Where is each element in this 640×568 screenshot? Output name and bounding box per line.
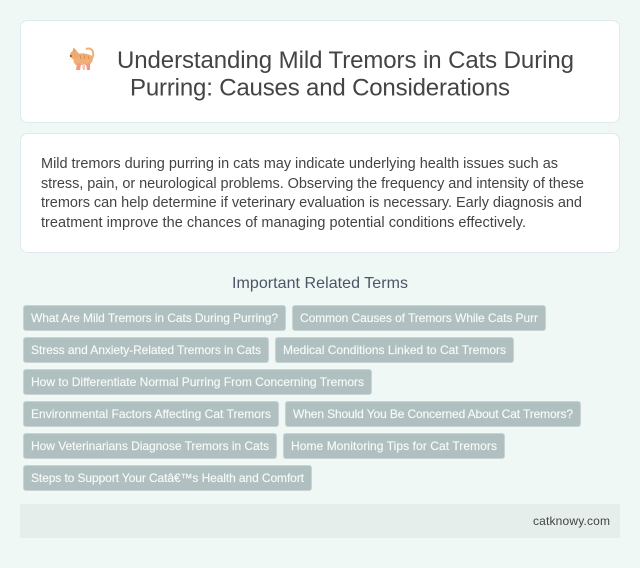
tag [286,402,580,426]
tag [24,338,268,362]
tag [24,402,278,426]
summary text: Mild tremors during purring in cats may indicate underlying health issues such as [41,156,558,172]
tag: Home Monitoring Tips for Cat Tremors [291,439,497,453]
icon: cat [70,48,93,70]
footer: catknowy.com [533,514,610,528]
tag [24,434,276,458]
summary text: treatment improve the chances of managing potential conditions effectively. [41,215,526,231]
tag [276,338,514,362]
heading: related terms: Important Related Terms [232,275,408,292]
tag: When Should You Be Concerned About Cat Tremors? [293,407,573,421]
title [117,47,574,102]
title: Understanding Mild Tremors in Cats During [117,47,574,74]
tag: Environmental Factors Affecting Cat Tremors [31,407,271,421]
tag [292,306,546,330]
tag list [24,306,580,490]
title: Purring: Causes and Considerations [130,74,510,102]
tag: Medical Conditions Linked to Cat Tremors [283,343,506,357]
tag [24,306,286,330]
summary text: stress, pain, or neurological problems. Observing the frequency and intensity of these [41,176,584,192]
tag [24,466,312,490]
tag: What Are Mild Tremors in Cats During Purring? [31,311,278,325]
tag: How Veterinarians Diagnose Tremors in Cats [31,439,269,453]
summary text: tremors can help determine if veterinary evaluation is necessary. Early diagnosis and [41,195,582,211]
tag: Steps to Support Your Catâ€™s Health and Comfort [31,471,305,485]
tag: Common Causes of Tremors While Cats Purr [300,311,538,325]
summary text [41,156,584,231]
tag [24,370,372,394]
footer [20,504,620,538]
panel: summary card [20,134,620,252]
tag [284,434,504,458]
tag: How to Differentiate Normal Purring From Concerning Tremors [31,375,364,389]
panel: title card [20,20,620,122]
tag: Stress and Anxiety-Related Tremors in Cats [31,343,261,357]
